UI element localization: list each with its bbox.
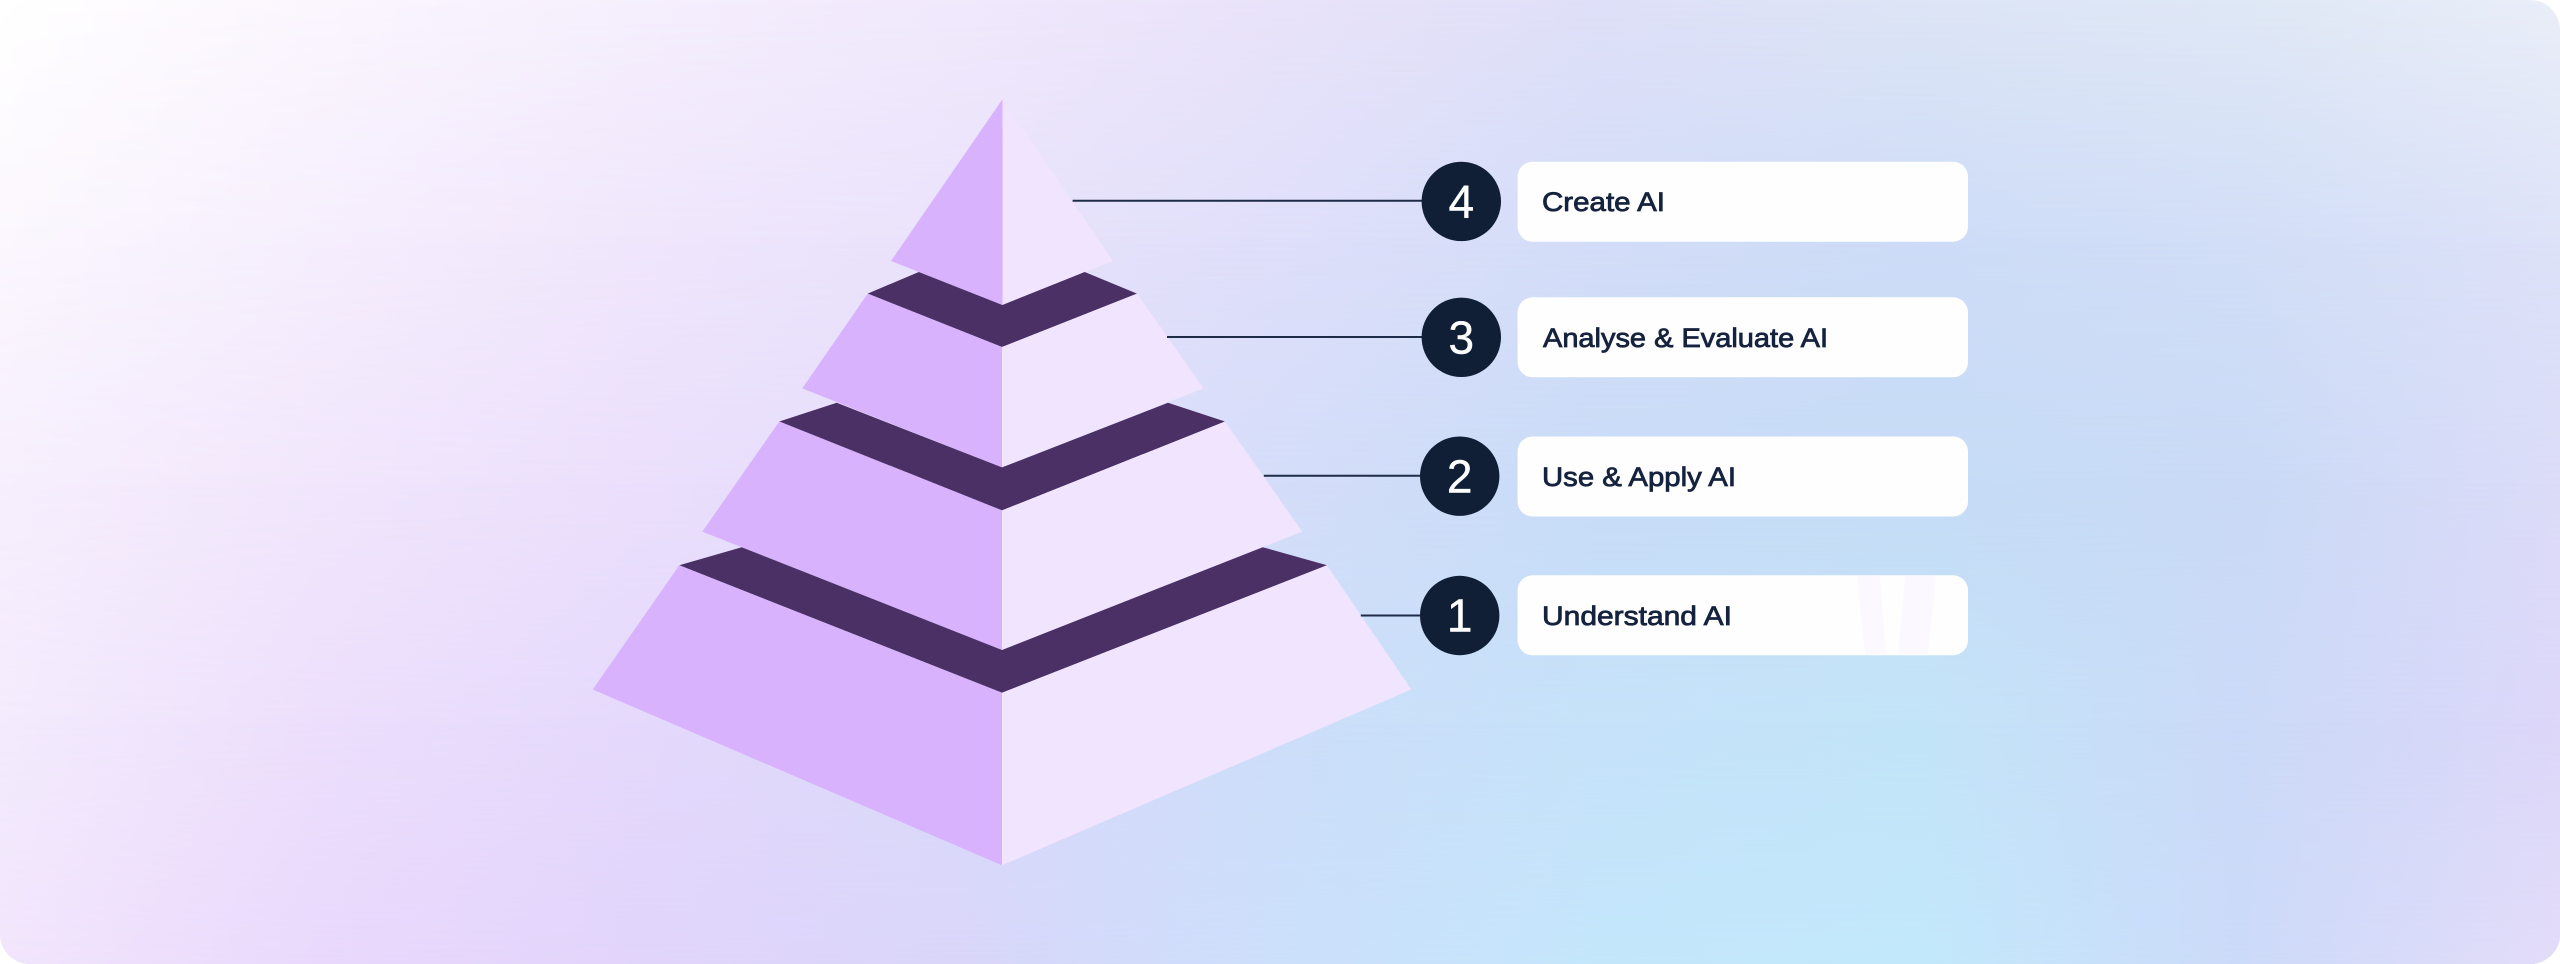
pyramid tier 1 (base) bbox=[593, 565, 1411, 865]
card: Create AI bbox=[1518, 162, 1968, 242]
connector line 1 bbox=[1361, 614, 1425, 616]
number badge 2: 2 bbox=[1447, 450, 1472, 502]
number badge 1 bbox=[1420, 576, 1499, 655]
number badge 3 bbox=[1422, 298, 1501, 377]
connector line 3 bbox=[1167, 336, 1425, 338]
pyramid tier 2 bbox=[702, 422, 1302, 650]
connector line 2 bbox=[1264, 475, 1425, 477]
level 3 row bbox=[1167, 297, 1968, 377]
number badge 4 bbox=[1422, 162, 1501, 241]
card: Analyse & Evaluate AI: Analyse & Evaluate AI bbox=[1543, 323, 1828, 353]
connector line 4 bbox=[1073, 200, 1425, 202]
card: Analyse & Evaluate AI bbox=[1518, 297, 1968, 377]
card: Use & Apply AI: Use & Apply AI bbox=[1542, 462, 1736, 492]
card: Understand AI bbox=[1518, 575, 1968, 655]
number badge 3: 3 bbox=[1449, 311, 1474, 363]
pyramid tier 4 (top) bbox=[891, 99, 1113, 305]
pyramid band under tier 4 bbox=[868, 272, 1137, 347]
number badge 2 bbox=[1420, 436, 1499, 516]
card: Use & Apply AI bbox=[1518, 436, 1968, 516]
number badge 1: 1 bbox=[1447, 590, 1472, 642]
pyramid band under tier 2 bbox=[679, 547, 1327, 693]
card: Create AI: Create AI bbox=[1542, 187, 1665, 217]
level 4 row bbox=[1073, 162, 1968, 242]
card: Understand AI: Understand AI bbox=[1542, 601, 1732, 631]
level 2 row bbox=[1264, 436, 1968, 516]
level 1 row bbox=[1361, 575, 1968, 655]
pyramid band under tier 3 bbox=[779, 403, 1225, 510]
pyramid bbox=[593, 99, 1411, 865]
number badge 4: 4 bbox=[1449, 176, 1474, 228]
pyramid tier 3 bbox=[802, 294, 1204, 467]
